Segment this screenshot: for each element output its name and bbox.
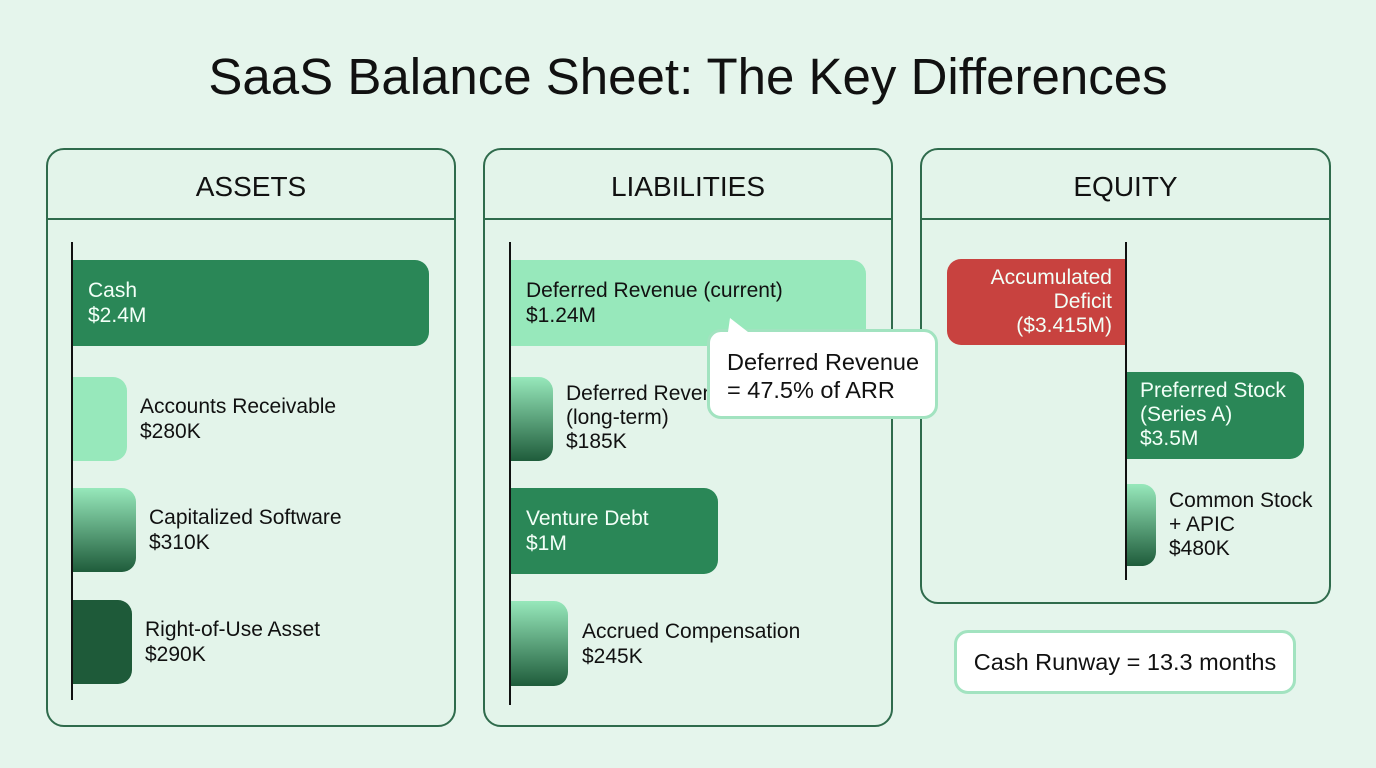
label: right-of-use asset: $290K (145, 643, 206, 666)
bar: venture debt (511, 488, 718, 574)
bar: accounts receivable (73, 377, 127, 461)
label: deferred revenue long-term: (long-term) (566, 406, 669, 429)
callout pointer (728, 318, 748, 332)
label: common stock: Common Stock (1169, 489, 1313, 512)
panel: equity (920, 148, 1331, 604)
callout text: = 47.5% of ARR (727, 377, 895, 403)
bar: cash: Cash (88, 279, 137, 302)
bar: deferred revenue current: Deferred Revenue (current) (526, 279, 783, 302)
bar: accumulated deficit: Accumulated (991, 266, 1112, 289)
label: accounts receivable (140, 395, 336, 443)
bar: common stock (1127, 484, 1156, 566)
label: deferred revenue long-term: $185K (566, 430, 627, 453)
panel: liabilities (483, 148, 893, 727)
callout: cash runway (954, 630, 1296, 694)
heading: assets: ASSETS (196, 171, 306, 202)
label: accrued compensation: $245K (582, 645, 643, 668)
bar: accumulated deficit: ($3.415M) (1016, 314, 1112, 337)
bar: right-of-use asset (73, 600, 132, 684)
label: common stock: + APIC (1169, 513, 1235, 536)
label: accrued compensation: Accrued Compensation (582, 620, 800, 643)
title: SaaS Balance Sheet: The Key Differences (208, 48, 1168, 105)
equity axis (1125, 242, 1127, 580)
bar: cash: $2.4M (88, 304, 146, 327)
bar: preferred stock (1127, 372, 1304, 459)
label: deferred revenue long-term: Deferred Revenue (566, 382, 738, 405)
bar: deferred revenue current (511, 260, 866, 346)
heading: equity (922, 150, 1329, 220)
bar: accumulated deficit (947, 259, 1125, 345)
bar: venture debt: Venture Debt (526, 507, 649, 530)
bar: deferred revenue current: $1.24M (526, 304, 596, 327)
label: common stock: $480K (1169, 537, 1230, 560)
label: capitalized software (149, 506, 342, 554)
callout: deferred revenue (707, 329, 938, 419)
label: accounts receivable: $280K (140, 420, 201, 443)
bar: deferred revenue long-term (511, 377, 553, 461)
label: deferred revenue long-term (566, 382, 738, 453)
bar: venture debt: $1M (526, 532, 567, 555)
bar: cash (73, 260, 429, 346)
callout text: Deferred Revenue (727, 349, 919, 375)
label: capitalized software: Capitalized Software (149, 506, 342, 529)
heading: liabilities: LIABILITIES (611, 171, 765, 202)
label: right-of-use asset: Right-of-Use Asset (145, 618, 320, 641)
label: capitalized software: $310K (149, 531, 210, 554)
label: common stock (1169, 489, 1313, 560)
label: accrued compensation (582, 620, 800, 668)
bar: accumulated deficit: Deficit (1054, 290, 1112, 313)
bar: preferred stock: Preferred Stock (1140, 379, 1286, 402)
bar: capitalized software (73, 488, 136, 572)
label: right-of-use asset (145, 618, 320, 666)
heading: assets (48, 150, 454, 220)
label: accounts receivable: Accounts Receivable (140, 395, 336, 418)
assets axis (71, 242, 73, 700)
liabilities axis (509, 242, 511, 705)
heading: liabilities (485, 150, 891, 220)
bar: preferred stock: (Series A) (1140, 403, 1232, 426)
callout: cash runway: Cash Runway = 13.3 months (974, 649, 1276, 675)
panel: assets (46, 148, 456, 727)
bar: accrued compensation (511, 601, 568, 686)
bar: preferred stock: $3.5M (1140, 427, 1198, 450)
heading: equity: EQUITY (1073, 171, 1178, 202)
callout text (727, 349, 919, 403)
